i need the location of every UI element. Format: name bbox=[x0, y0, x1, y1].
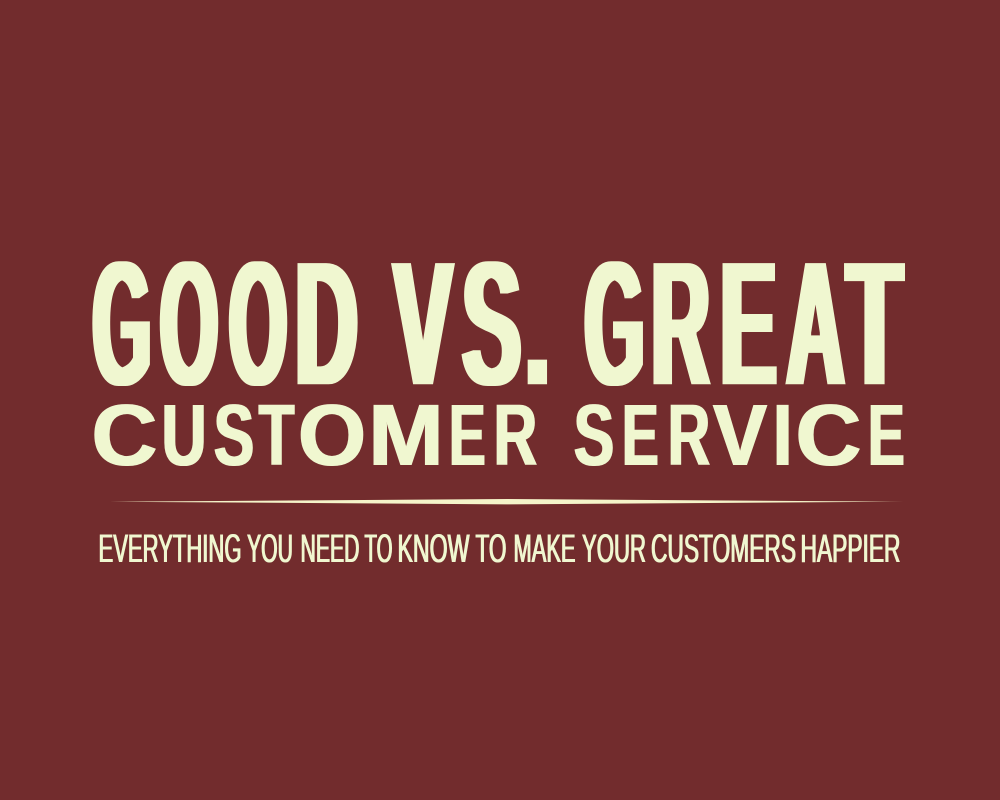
title: Good vs. Great: G bbox=[93, 223, 151, 423]
subtitle: YOU bbox=[247, 527, 293, 571]
title: Good vs. Great bbox=[93, 223, 902, 423]
heading: Customer Service: E bbox=[868, 387, 905, 484]
subtitle: TO bbox=[364, 527, 392, 571]
subtitle: YOUR bbox=[582, 527, 646, 571]
title: Good vs. Great: R bbox=[652, 223, 710, 423]
heading: Customer Service: R bbox=[494, 387, 537, 484]
subtitle: TO bbox=[476, 527, 506, 571]
heading: Customer Service: R bbox=[668, 387, 710, 484]
heading: Customer Service: V bbox=[713, 387, 767, 484]
title: Good vs. Great: . bbox=[525, 223, 550, 423]
divider line bbox=[110, 499, 904, 504]
title: Good vs. Great: V bbox=[394, 223, 452, 423]
heading: Customer Service bbox=[92, 387, 905, 484]
heading: Customer Service: U bbox=[162, 387, 206, 484]
title: Good vs. Great: S bbox=[462, 223, 521, 423]
heading: Customer Service: O bbox=[298, 387, 366, 484]
title: Good vs. Great: T bbox=[846, 223, 902, 423]
heading: Customer Service: E bbox=[449, 387, 486, 484]
heading: Customer Service: C bbox=[796, 387, 861, 484]
heading: Customer Service: I bbox=[773, 387, 792, 484]
subtitle: CUSTOMERS bbox=[651, 527, 796, 571]
heading: Customer Service: C bbox=[92, 387, 157, 484]
title: Good vs. Great: A bbox=[786, 223, 844, 423]
title: Good vs. Great: G bbox=[585, 223, 644, 423]
title: Good vs. Great: O bbox=[160, 223, 218, 423]
title: Good vs. Great: E bbox=[720, 223, 776, 423]
title: Good vs. Great: D bbox=[295, 223, 358, 423]
subtitle: EVERYTHING bbox=[98, 527, 242, 571]
subtitle: MAKE bbox=[514, 527, 576, 571]
subtitle: HAPPIER bbox=[800, 527, 900, 571]
heading: Customer Service: S bbox=[214, 387, 254, 484]
heading: Customer Service: S bbox=[574, 387, 614, 484]
title: Good vs. Great: O bbox=[229, 223, 287, 423]
subtitle bbox=[98, 527, 900, 571]
subtitle: NEED bbox=[300, 527, 360, 571]
heading: Customer Service: E bbox=[622, 387, 659, 484]
heading: Customer Service: M bbox=[368, 387, 444, 484]
heading: Customer Service: T bbox=[259, 387, 294, 484]
subtitle: KNOW bbox=[398, 527, 470, 571]
